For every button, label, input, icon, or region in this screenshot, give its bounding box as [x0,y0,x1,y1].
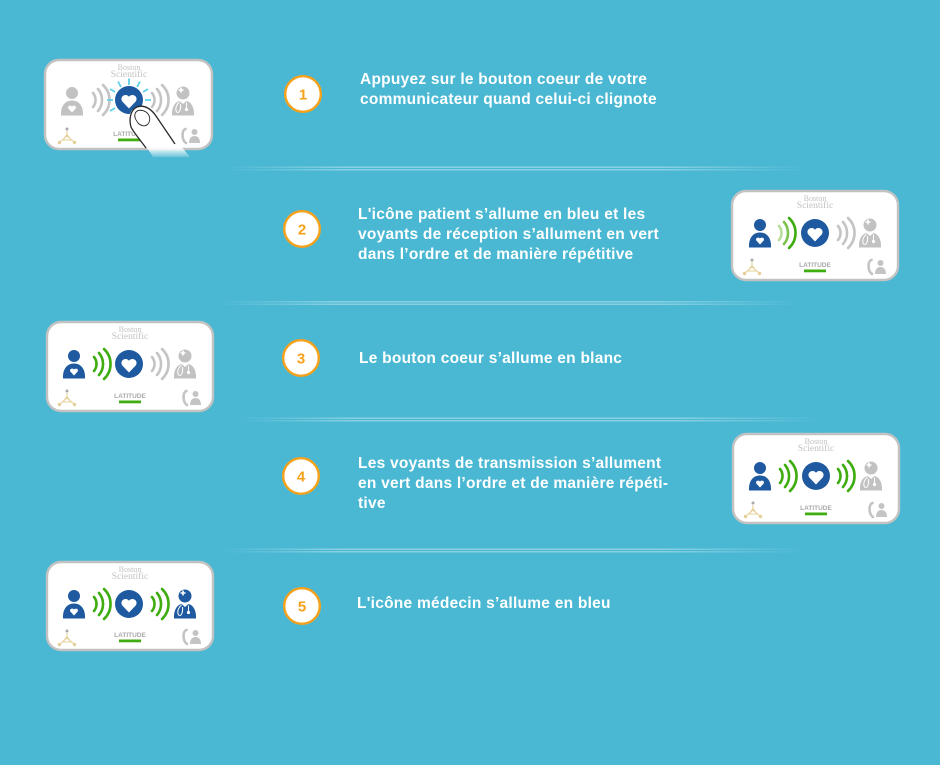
icon: finger pressing button [130,106,190,157]
step 1 text: communicateur quand celui-ci clignote [360,91,657,108]
step 4 text: Les voyants de transmission s’allument [358,455,661,472]
panel: device step 1: Scientific [111,69,147,80]
step 2 text: voyants de réception s’allument en vert [358,226,659,243]
step number 2: 2 [298,222,306,238]
panel: device step 4: Boston [805,437,827,446]
panel: device step 4 [733,434,899,523]
panel: device step 2 [732,191,898,280]
step number 4 [283,458,319,494]
divider 4 [222,548,807,552]
divider 1 [225,166,810,170]
panel: device step 5: Boston [119,565,141,574]
panel: device step 2: Scientific [797,200,833,211]
panel: device step 1: LATITUDE [113,131,145,138]
step number 5: 5 [298,598,306,616]
step 3 text: Le bouton coeur s’allume en blanc [359,350,622,367]
step 2 text: L'icône patient s’allume en bleu et les [358,206,645,223]
panel: device step 5: Scientific [112,571,148,582]
panel: device step 4: Scientific [798,443,834,454]
panel: device step 3: LATITUDE [114,393,146,400]
panel: device step 2: LATITUDE [799,262,831,269]
step number 4: 4 [297,468,306,486]
step number 1 [285,76,321,112]
step number 3 [283,340,319,376]
panel: device step 4: LATITUDE [800,505,832,512]
step 2 text: dans l’ordre et de manière répétitive [358,246,634,263]
step 4 text: tive [358,495,386,512]
panel: device step 1: Boston [118,63,140,72]
panel: device step 1 [45,60,212,149]
panel: device step 5: LATITUDE [114,632,146,639]
step number 1: 1 [299,86,307,104]
step number 5 [284,588,320,624]
panel: device step 3 [47,322,213,411]
panel: device step 2: Boston [804,194,826,203]
step 5 text: L'icône médecin s’allume en bleu [357,595,611,612]
step number 2 [284,211,320,247]
panel: device step 3: Scientific [112,331,148,342]
panel: device step 5 [47,562,213,650]
step number 3: 3 [297,350,305,368]
step 4 text: en vert dans l’ordre et de manière répéti- [358,475,668,492]
step 1 text: Appuyez sur le bouton coeur de votre [360,71,647,88]
panel: device step 3: Boston [119,325,141,334]
divider 3 [238,418,823,422]
divider 2 [218,301,803,305]
